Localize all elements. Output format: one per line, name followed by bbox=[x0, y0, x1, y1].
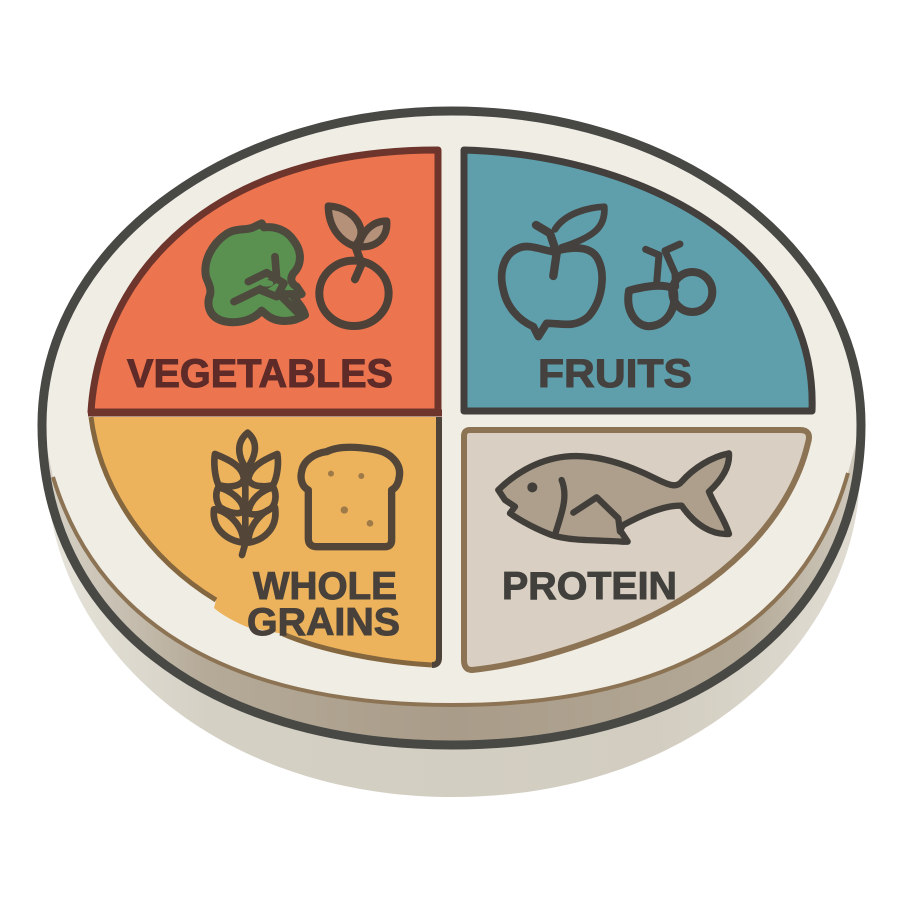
panel: protein bbox=[464, 430, 809, 670]
grains right border bbox=[432, 417, 439, 665]
plate dark rim bbox=[42, 111, 861, 745]
label: protein: PROTEIN bbox=[502, 565, 677, 608]
fruits segment bbox=[464, 150, 812, 411]
plate brown edge bbox=[53, 473, 848, 705]
icon: fish bbox=[498, 453, 729, 542]
grains segment fill bbox=[91, 417, 439, 665]
icon: cherries bbox=[628, 244, 712, 326]
plate: base and rim bbox=[42, 111, 861, 797]
panel: vegetables bbox=[91, 150, 438, 412]
divider between vegetables and grains bbox=[88, 410, 442, 416]
icon: apple bbox=[502, 207, 604, 337]
label: grains: GRAINS bbox=[247, 601, 400, 644]
label: fruits: FRUITS bbox=[538, 352, 692, 396]
label: whole: WHOLE bbox=[253, 565, 397, 608]
panel: fruits bbox=[464, 150, 812, 411]
plate tan inner band bbox=[42, 111, 861, 745]
plate base side bbox=[47, 470, 860, 797]
label: vegetables: VEGETABLES bbox=[127, 352, 393, 396]
plate cream top surface bbox=[42, 111, 861, 705]
panel: whole grains bbox=[88, 413, 442, 665]
grains segment border bbox=[91, 417, 432, 665]
vegetables segment bbox=[91, 150, 438, 412]
protein segment bbox=[464, 430, 809, 670]
icon: wheat bbox=[214, 433, 278, 555]
icon: broccoli bbox=[205, 223, 305, 322]
icon: apple with leaves bbox=[319, 206, 389, 326]
icon: bread bbox=[301, 447, 400, 547]
